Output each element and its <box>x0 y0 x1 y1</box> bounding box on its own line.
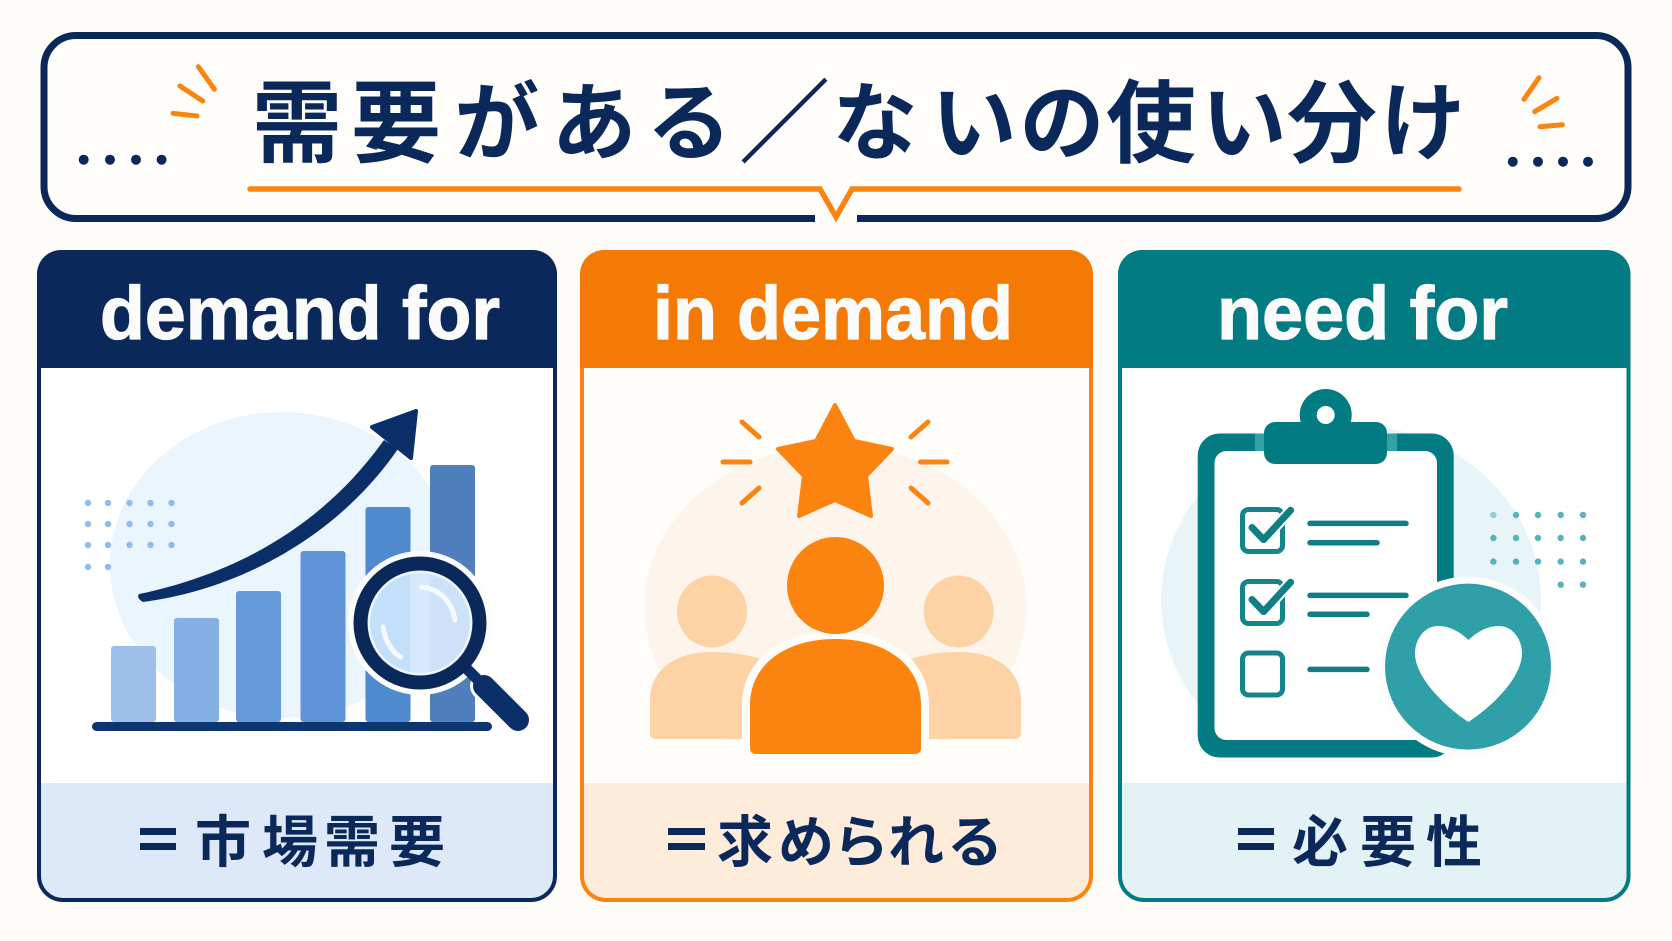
side people <box>650 576 1021 739</box>
checkbox rows <box>1242 510 1282 695</box>
magnifier <box>348 551 518 720</box>
equals sign <box>140 828 176 850</box>
heading: demand for: demand for <box>100 271 500 355</box>
header band: need for <box>1118 250 1630 368</box>
right dots <box>1508 157 1593 167</box>
clipboard board <box>1198 434 1454 758</box>
title text: 分 <box>1287 51 1377 181</box>
panel: need for <box>1118 250 1630 900</box>
centre person <box>750 537 921 754</box>
title text: け <box>1380 55 1466 178</box>
left sparks <box>173 67 214 116</box>
title banner <box>44 36 1628 218</box>
icon: clipboard checklist with heart <box>1161 389 1586 775</box>
header band: in demand <box>580 250 1093 368</box>
star <box>778 405 892 516</box>
footer band: need for <box>1121 783 1628 900</box>
left dots <box>79 155 167 165</box>
dot pattern <box>85 500 175 570</box>
heart badge <box>1378 577 1558 757</box>
panel: in demand <box>580 250 1093 900</box>
title text: 使 <box>1106 51 1196 181</box>
growth arrow <box>138 411 416 602</box>
title text: 需要 <box>252 51 441 181</box>
right sparks <box>1524 78 1562 127</box>
caption: 求められる: 求められる <box>717 798 1003 879</box>
icon: bar chart with growth arrow and magnifier <box>85 411 518 731</box>
title text: がある <box>454 55 732 178</box>
panel: demand for <box>37 250 557 900</box>
title text: ないの <box>832 55 1105 178</box>
caption: 必要性: 必要性 <box>1292 798 1482 879</box>
clipboard clip <box>1264 389 1387 464</box>
heading: need for: need for <box>1217 271 1508 355</box>
axis <box>92 722 492 731</box>
heading: in demand: in demand <box>653 271 1013 355</box>
star rays <box>723 422 947 503</box>
icon: people with star <box>644 405 1026 769</box>
equals sign <box>1238 828 1274 850</box>
check marks <box>1252 510 1291 612</box>
dot pattern <box>1490 512 1586 588</box>
orange underline with pointer <box>250 189 1459 217</box>
title text: ／ <box>739 50 830 182</box>
footer band: demand for <box>40 783 554 900</box>
banner frame <box>44 36 1628 218</box>
equals sign <box>668 828 705 850</box>
header band: demand for <box>37 250 557 368</box>
text lines <box>1310 523 1406 669</box>
footer band: in demand <box>583 783 1090 900</box>
caption: 市場需要: 市場需要 <box>195 798 445 879</box>
title text: い <box>1201 55 1287 178</box>
bars <box>111 465 475 722</box>
